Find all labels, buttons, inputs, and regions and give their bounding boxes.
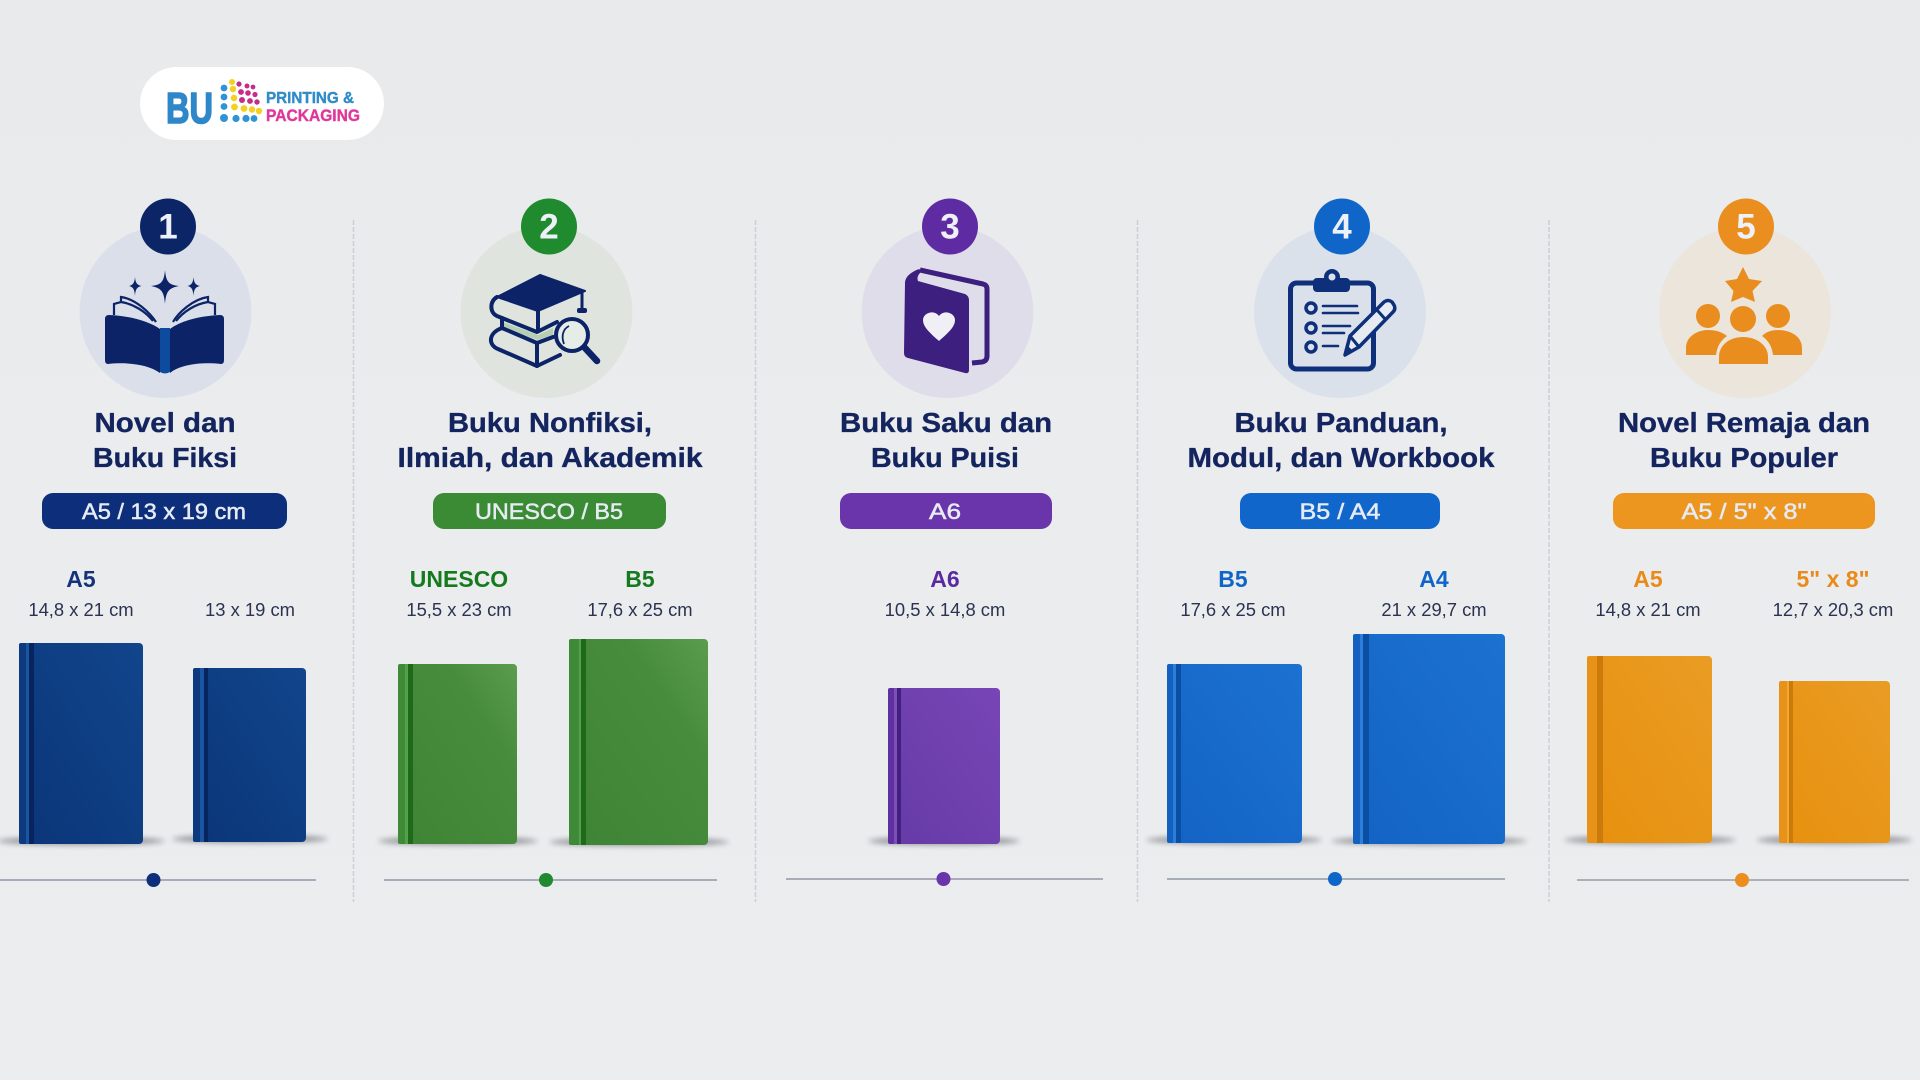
heading	[1188, 407, 1495, 473]
size label A6: 10,5 x 14,8 cm	[885, 599, 1005, 620]
heading: Buku Nonfiksi,	[448, 407, 652, 438]
icon circle with people and star	[1659, 226, 1831, 398]
size label B5: 17,6 x 25 cm	[1180, 599, 1286, 620]
book A5	[1564, 656, 1736, 844]
size label 13 x 19: 13 x 19 cm	[205, 599, 295, 620]
book A6	[868, 688, 1020, 845]
size label B5: 17,6 x 25 cm	[587, 599, 693, 620]
heading: Buku Puisi	[871, 442, 1019, 473]
heading: Buku Panduan,	[1234, 407, 1448, 438]
number badge 2	[521, 198, 577, 254]
logo	[140, 67, 384, 140]
size pill	[42, 493, 287, 529]
size label A5: A5	[1633, 566, 1663, 592]
size pill: A5 / 5" x 8"	[1682, 499, 1806, 524]
book A5	[0, 643, 165, 845]
number badge 5: 5	[1736, 208, 1756, 246]
number badge 3	[922, 198, 978, 254]
heading	[840, 407, 1052, 473]
book UNESCO	[378, 664, 538, 845]
heading: Modul, dan Workbook	[1188, 442, 1495, 473]
size label B5	[1180, 566, 1286, 620]
icon circle with clipboard	[1254, 226, 1426, 398]
icon circle with open book	[80, 226, 252, 398]
size label A5	[28, 566, 134, 620]
number badge 1	[140, 198, 196, 254]
size label 5 x 8	[1773, 566, 1893, 620]
size label 5 x 8: 12,7 x 20,3 cm	[1773, 599, 1893, 620]
number badge 2: 2	[539, 208, 559, 246]
size label A6	[885, 566, 1005, 620]
logo: PACKAGING	[266, 106, 360, 125]
heading	[93, 407, 237, 473]
size label A4	[1381, 566, 1487, 620]
slider	[384, 873, 717, 887]
size label A5: A5	[66, 566, 96, 592]
size pill: A5 / 13 x 19 cm	[82, 499, 246, 524]
panel: buku saku	[786, 198, 1103, 886]
book 5 x 8	[1756, 681, 1912, 844]
size label UNESCO: 15,5 x 23 cm	[406, 599, 512, 620]
number badge 1: 1	[158, 208, 178, 246]
size label A4: A4	[1419, 566, 1449, 592]
slider	[0, 873, 316, 887]
size pill: UNESCO / B5	[475, 499, 623, 524]
slider	[1577, 873, 1909, 887]
heading: Novel dan	[94, 407, 236, 438]
panel: novel dan buku fiksi	[0, 198, 328, 887]
book A4	[1331, 634, 1527, 845]
size label B5: B5	[1218, 566, 1248, 592]
number badge 4: 4	[1332, 208, 1352, 246]
heading: Buku Saku dan	[840, 407, 1052, 438]
heading	[1618, 407, 1870, 473]
book B5	[1146, 664, 1322, 844]
heading: Novel Remaja dan	[1618, 407, 1870, 438]
size label A4: 21 x 29,7 cm	[1381, 599, 1487, 620]
icon circle with books and magnifier	[460, 226, 632, 398]
logo: PRINTING &	[266, 90, 354, 107]
size pill: A6	[929, 499, 961, 524]
size label B5	[587, 566, 693, 620]
heading: Ilmiah, dan Akademik	[398, 442, 703, 473]
number badge 5	[1718, 198, 1774, 254]
icon circle with heart book	[862, 226, 1034, 398]
size label UNESCO	[406, 566, 512, 620]
logo: BU	[166, 84, 213, 133]
size pill	[1240, 493, 1440, 529]
size label B5: B5	[625, 566, 655, 592]
number badge 3: 3	[940, 208, 960, 246]
heading: Buku Fiksi	[93, 442, 237, 473]
heading: Buku Populer	[1650, 442, 1838, 473]
slider	[1167, 872, 1505, 886]
panel: buku panduan	[1146, 198, 1527, 886]
slider	[786, 872, 1103, 886]
book 13 x 19	[172, 668, 328, 843]
panel: novel remaja	[1564, 198, 1912, 887]
size pill: B5 / A4	[1300, 499, 1380, 524]
size pill	[1613, 493, 1875, 529]
size pill	[840, 493, 1052, 529]
size label UNESCO: UNESCO	[410, 566, 508, 592]
size label A5: 14,8 x 21 cm	[28, 599, 134, 620]
book B5	[549, 639, 729, 846]
size label A6: A6	[930, 566, 960, 592]
panel: buku nonfiksi	[378, 198, 729, 887]
size label 5 x 8: 5" x 8"	[1797, 566, 1869, 592]
size label A5: 14,8 x 21 cm	[1595, 599, 1701, 620]
number badge 4	[1314, 198, 1370, 254]
size pill	[433, 493, 666, 529]
heading	[398, 407, 703, 473]
size label A5	[1595, 566, 1701, 620]
